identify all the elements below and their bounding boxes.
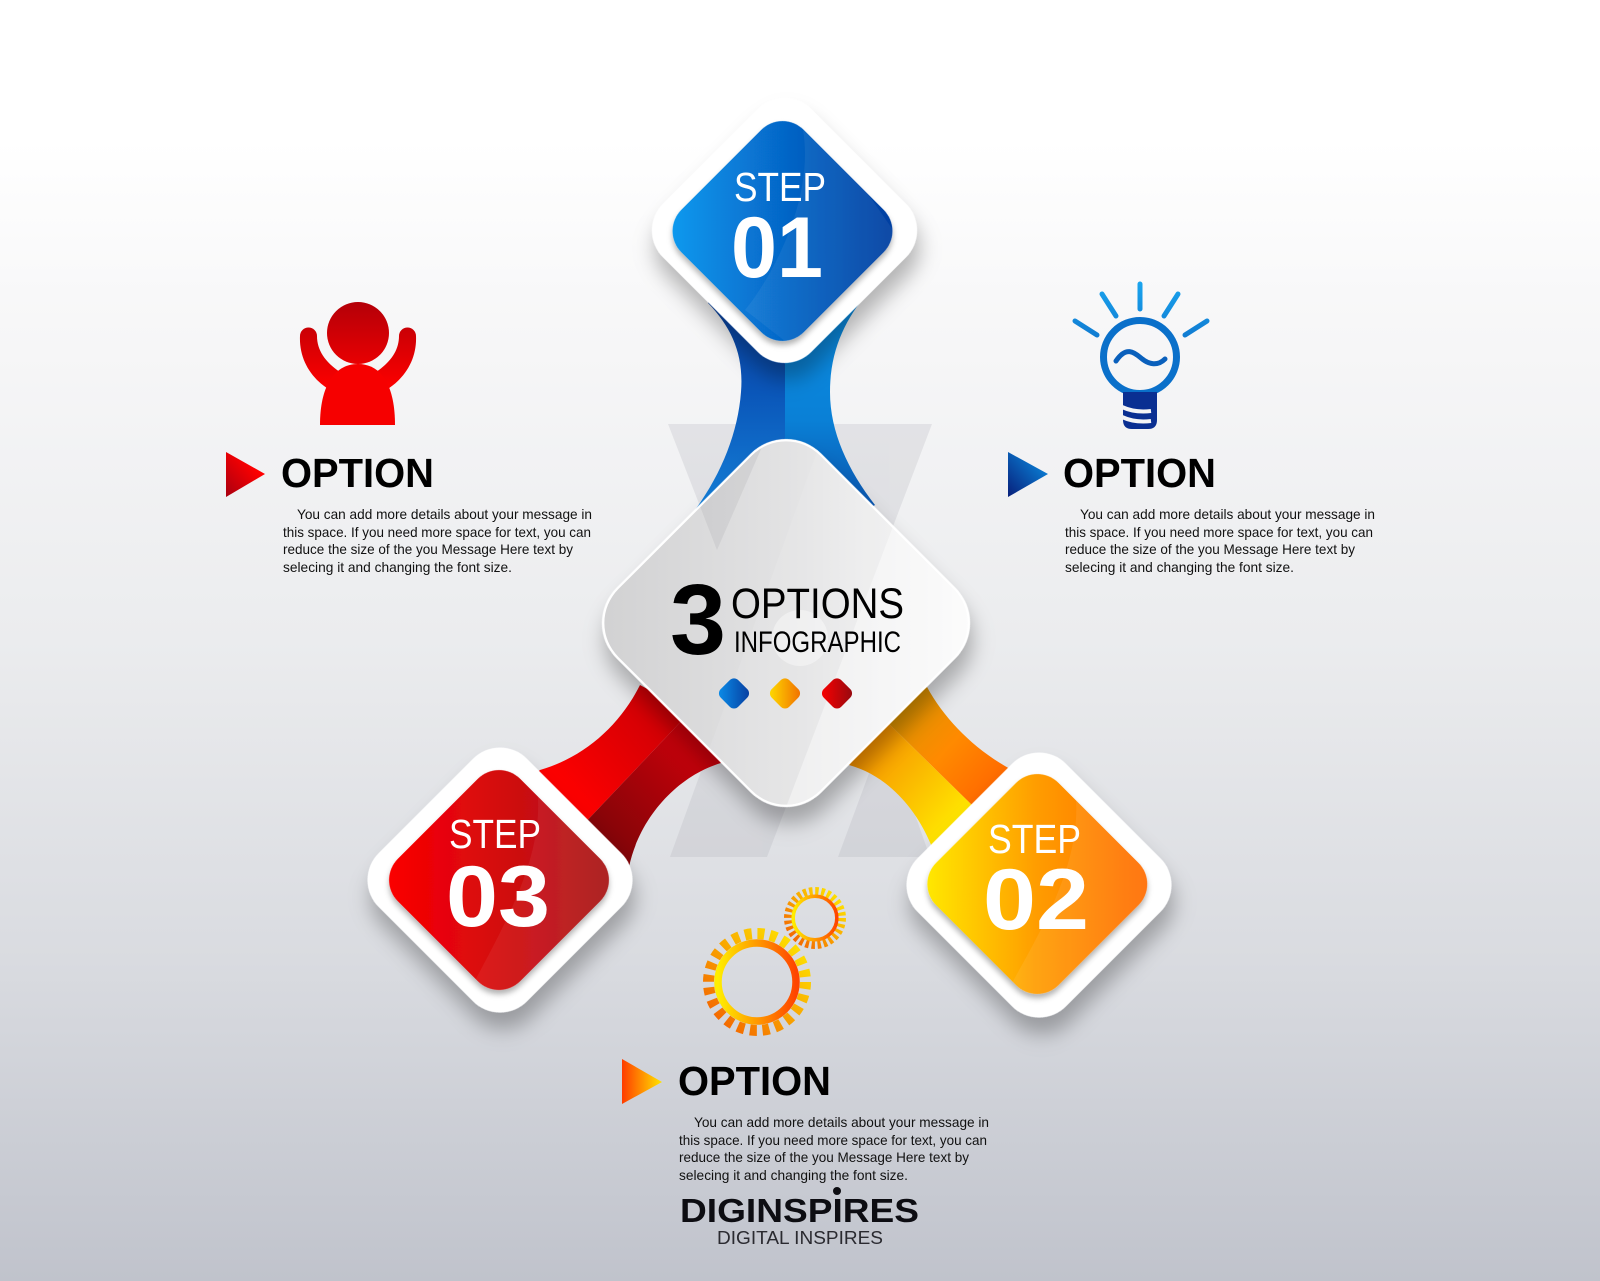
step 02 label — [983, 816, 1089, 948]
step 01 label: STEP — [734, 164, 826, 210]
description: selecing it and changing the font size. — [1065, 559, 1294, 575]
icon: person with raised arms — [300, 302, 416, 425]
description — [283, 506, 592, 575]
step 03 panel — [352, 732, 648, 1028]
description: this space. If you need more space for text, you can — [679, 1132, 987, 1148]
brand logo: DIGITAL INSPIRES — [717, 1228, 883, 1248]
step 01 blue diamond — [660, 109, 905, 353]
step 03 red diamond — [377, 758, 621, 1002]
step 02 orange diamond — [915, 762, 1160, 1006]
icon: light bulb — [1075, 284, 1207, 429]
step 01 label: 01 — [731, 200, 823, 296]
small red diamond — [819, 676, 855, 711]
brand logo — [680, 1187, 919, 1248]
connector: step 01 to centre — [695, 250, 875, 560]
centre white frame — [581, 418, 991, 828]
small blue diamond — [716, 676, 752, 711]
description: You can add more details about your message in — [1080, 506, 1375, 522]
centre title — [670, 564, 904, 676]
watermark logo — [668, 424, 932, 857]
heading: OPTION — [1063, 450, 1216, 496]
centre grey diamond — [584, 421, 988, 825]
step 02 label: STEP — [988, 816, 1081, 862]
description: reduce the size of the you Message Here text by — [679, 1149, 969, 1165]
description: selecing it and changing the font size. — [679, 1167, 908, 1183]
heading: OPTION — [678, 1058, 831, 1104]
centre title: 3 — [670, 564, 726, 676]
option block: right — [1008, 450, 1375, 575]
centre title: OPTIONS — [731, 580, 904, 628]
icon: gears — [708, 891, 842, 1030]
arrow: orange — [622, 1059, 662, 1104]
step 03 white frame — [352, 732, 648, 1028]
centre panel — [594, 438, 983, 834]
description — [679, 1114, 989, 1183]
description: selecing it and changing the font size. — [283, 559, 512, 575]
description: this space. If you need more space for text, you can — [1065, 524, 1373, 540]
step 03 label — [446, 811, 550, 945]
connector: step 02 to centre — [849, 687, 1012, 847]
step 01 white frame — [636, 82, 933, 379]
connector: step 03 to centre — [530, 685, 721, 867]
description: reduce the size of the you Message Here text by — [1065, 541, 1355, 557]
arrow: blue — [1008, 452, 1048, 497]
description: this space. If you need more space for text, you can — [283, 524, 591, 540]
description: reduce the size of the you Message Here text by — [283, 541, 573, 557]
description — [1065, 506, 1375, 575]
heading: OPTION — [281, 450, 434, 496]
option block: left — [226, 450, 592, 575]
step 03 label: STEP — [449, 811, 541, 857]
small orange diamond — [767, 676, 803, 711]
step 01 panel — [644, 116, 930, 390]
arrow: red — [226, 452, 265, 497]
option block: bottom — [622, 1058, 989, 1183]
centre title: INFOGRAPHIC — [734, 626, 901, 659]
step 02 label: 02 — [983, 852, 1089, 948]
step 03 label: 03 — [446, 849, 550, 945]
description: You can add more details about your message in — [694, 1114, 989, 1130]
step 02 panel — [891, 737, 1187, 1033]
description: You can add more details about your message in — [297, 506, 592, 522]
brand logo: DIGINSPIRES — [680, 1192, 919, 1229]
step 02 white frame — [891, 737, 1187, 1033]
